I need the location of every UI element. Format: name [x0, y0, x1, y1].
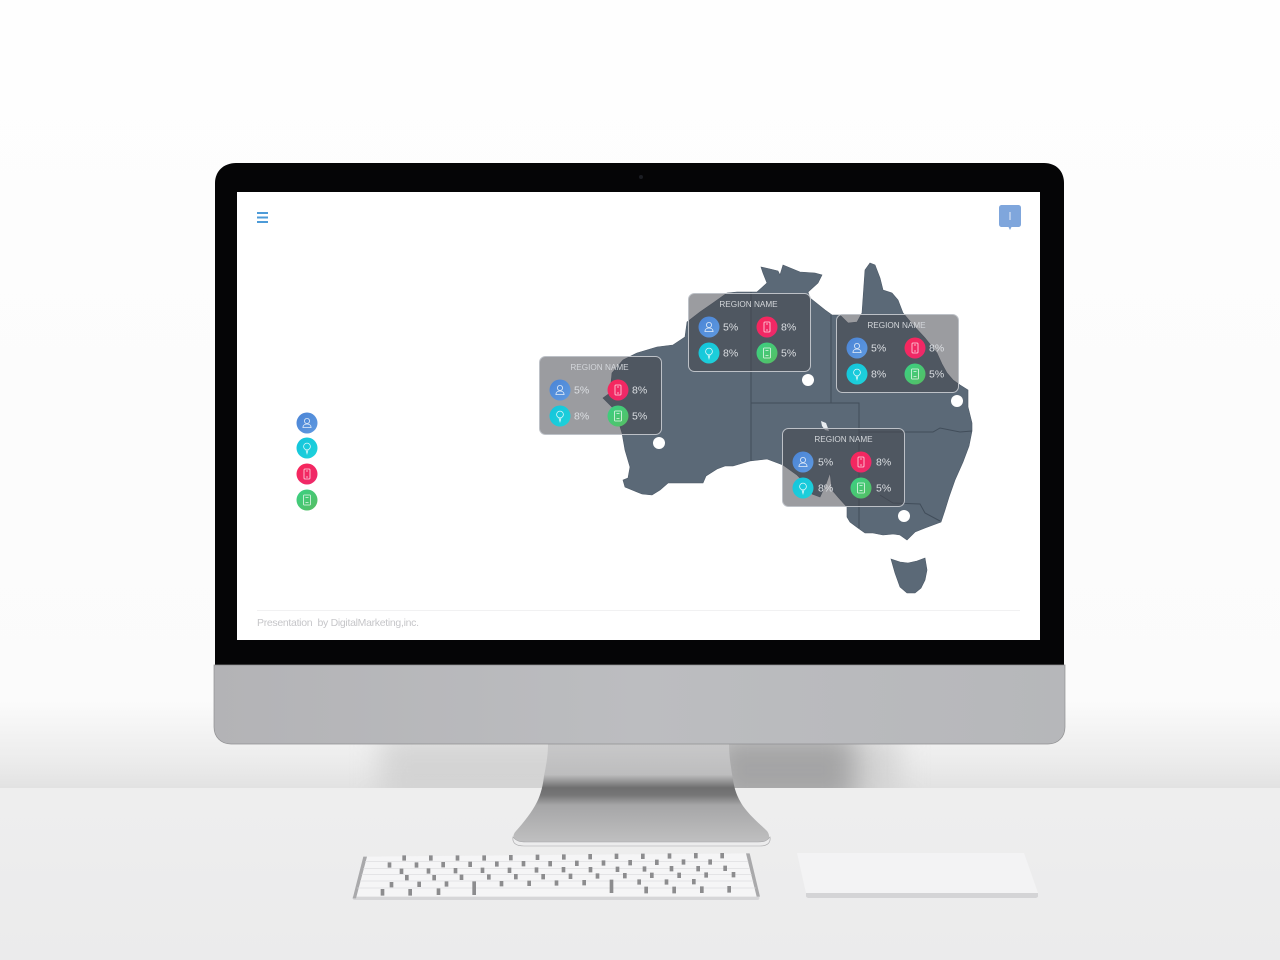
region card: north: 5% [781, 348, 796, 360]
keyboard [353, 853, 760, 900]
trackpad [797, 853, 1038, 898]
mainland [603, 263, 972, 540]
region card: west: 5% [574, 384, 589, 396]
desk surface [0, 788, 1280, 960]
region card: south [782, 428, 904, 506]
footer text: Presentation by DigitalMarketing,inc. [257, 617, 419, 629]
region card: northeast: 8% [871, 368, 886, 380]
region card: west [540, 356, 662, 434]
region card: west: 8% [574, 410, 589, 422]
region card: north: 8% [781, 322, 796, 334]
region card: west: REGION NAME [570, 363, 629, 372]
region card: northeast: 5% [929, 368, 944, 380]
region card: north [688, 294, 810, 372]
region card: northeast: REGION NAME [867, 321, 926, 330]
region card: south: 5% [818, 456, 833, 468]
monitor stand [513, 744, 770, 846]
legend icons [296, 412, 318, 510]
monitor bezel [215, 163, 1064, 666]
region card: northeast: 8% [929, 342, 944, 354]
region card: north: REGION NAME [719, 300, 778, 309]
region card: west: 8% [632, 384, 647, 396]
region card: north: 8% [723, 348, 738, 360]
monitor chin [214, 665, 1065, 744]
map of Australia [603, 263, 972, 593]
region markers [653, 374, 963, 522]
region card: northeast [836, 314, 958, 392]
notification icon [999, 205, 1021, 230]
region card: south: 8% [818, 482, 833, 494]
wall shadow behind stand [374, 744, 906, 788]
menu icon [257, 212, 268, 223]
region card: south: 5% [876, 482, 891, 494]
stand lip [513, 837, 770, 846]
region card: north: 5% [723, 322, 738, 334]
region card: south: 8% [876, 456, 891, 468]
camera [639, 175, 643, 179]
region card: south: REGION NAME [814, 435, 873, 444]
screen [237, 192, 1040, 640]
state borders [751, 292, 972, 528]
lake [821, 421, 829, 431]
region card: west: 5% [632, 410, 647, 422]
region card: northeast: 5% [871, 342, 886, 354]
stand neck and foot [513, 744, 769, 845]
Tasmania [891, 558, 927, 593]
monitor [214, 163, 1065, 744]
